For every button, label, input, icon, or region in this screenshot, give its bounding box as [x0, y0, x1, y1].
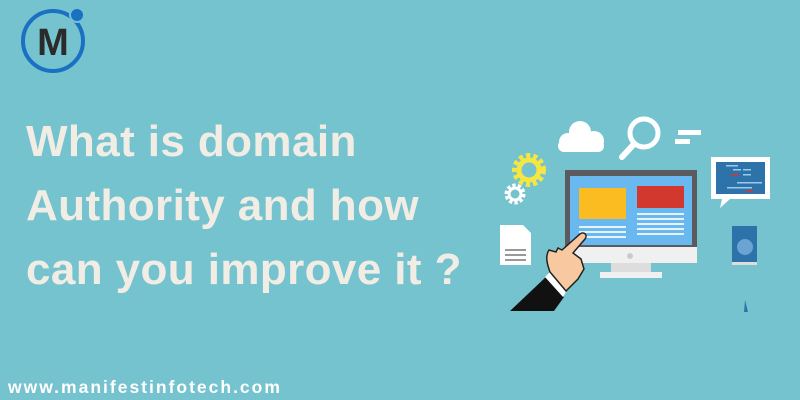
icon: book	[732, 226, 757, 265]
website url: www.manifestinfotech.com	[8, 377, 282, 397]
hand pointing	[510, 233, 586, 311]
title	[26, 117, 462, 294]
title: Authority and how	[26, 181, 419, 230]
icon: magnifier	[622, 119, 658, 157]
title: What is domain	[26, 117, 357, 166]
logo	[21, 9, 85, 73]
logo: M	[37, 22, 69, 64]
icon: cloud	[558, 121, 604, 152]
icon: speech bubble	[711, 157, 770, 208]
monitor	[565, 170, 697, 278]
icon: document	[500, 225, 531, 265]
icon: gears	[507, 156, 543, 202]
title: can you improve it ?	[26, 245, 462, 294]
icon: lines	[675, 130, 701, 144]
